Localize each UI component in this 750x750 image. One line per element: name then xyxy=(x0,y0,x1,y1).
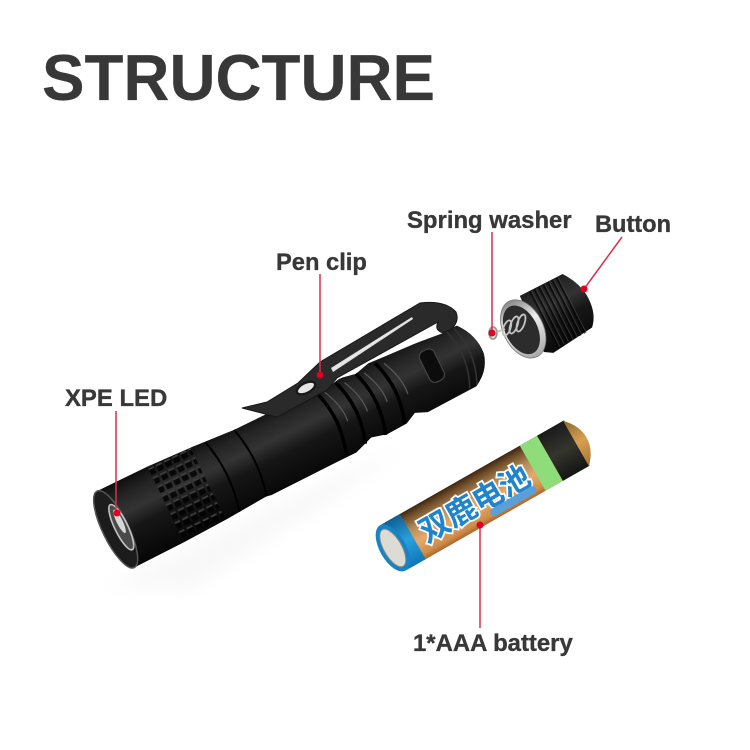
label: XPE LED xyxy=(65,385,167,516)
spring xyxy=(489,313,527,339)
label: Pen clip xyxy=(276,250,367,378)
label: Spring washer xyxy=(407,207,572,336)
battery sub-label pill xyxy=(489,485,538,517)
label: Pen clip: Pen clip xyxy=(276,250,367,276)
silver collar xyxy=(491,292,555,366)
label: XPE LED: XPE LED xyxy=(65,385,167,412)
body ribs xyxy=(316,361,411,455)
battery gold wrap xyxy=(385,420,590,568)
clip slit xyxy=(331,317,413,372)
clip rivet xyxy=(295,379,317,397)
LED lens xyxy=(104,502,138,552)
knurled cap xyxy=(516,269,603,356)
tail grooves xyxy=(443,326,484,388)
gold cap xyxy=(563,415,599,466)
label: Button: Button xyxy=(595,212,671,238)
tail cap button with spring xyxy=(489,269,603,369)
black band xyxy=(537,421,589,481)
blue end xyxy=(380,514,426,571)
front bezel xyxy=(85,485,146,573)
white gap under clip xyxy=(338,322,446,380)
soft shadow xyxy=(110,450,400,590)
label: Button xyxy=(580,212,671,292)
green band xyxy=(520,436,563,491)
label: Spring washer: Spring washer xyxy=(407,207,572,234)
tail slot xyxy=(417,347,447,384)
flashlight body xyxy=(85,302,501,590)
title: STRUCTURE xyxy=(42,41,435,114)
pen clip xyxy=(242,302,457,417)
label: 1*AAA battery xyxy=(413,522,573,657)
AAA battery xyxy=(369,415,599,577)
barrel xyxy=(85,312,501,573)
inner contact xyxy=(495,299,547,360)
ring grooves xyxy=(206,440,244,512)
label: 1*AAA battery: 1*AAA battery xyxy=(413,630,573,657)
knurled grip xyxy=(148,448,226,540)
battery brand: 双鹿电池 xyxy=(413,459,536,549)
positive terminal xyxy=(369,519,417,577)
